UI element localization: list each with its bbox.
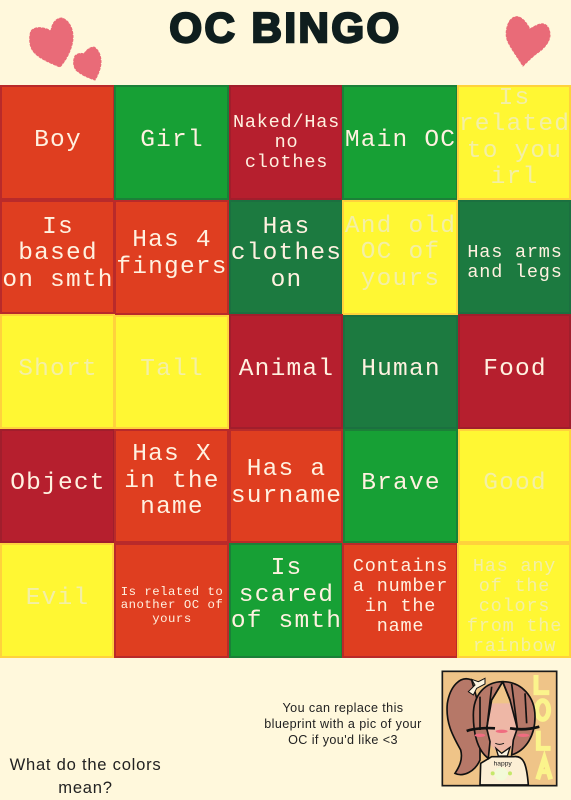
hair xyxy=(473,682,503,758)
bingo cell: Object: Object xyxy=(10,470,106,497)
bingo cell: Human xyxy=(343,315,458,429)
bingo cell: Human: Human xyxy=(361,356,441,383)
bingo cell: 4 fingers: Has 4 fingers xyxy=(116,227,228,280)
bow xyxy=(468,678,485,695)
ponytail xyxy=(447,679,480,775)
bingo cell: Tall: Tall xyxy=(140,356,204,383)
collar xyxy=(496,747,510,756)
bingo cell: old OC: And old OC of yours xyxy=(345,213,456,293)
bingo cell: Good: Good xyxy=(483,470,547,497)
eyes and blush xyxy=(467,727,539,731)
name letters xyxy=(536,675,551,779)
bingo cell: surname: Has a surname xyxy=(231,456,342,510)
bingo cell: old OC xyxy=(342,200,458,315)
bingo cell: Food xyxy=(458,314,571,429)
bingo cell: Boy xyxy=(0,85,115,200)
bingo cell: based on smth xyxy=(0,200,115,314)
bingo cell: Girl: Girl xyxy=(140,127,204,154)
icon: two pixel hearts xyxy=(29,18,102,81)
bingo cell: Brave: Brave xyxy=(361,470,441,497)
text: colors question: What do the colors xyxy=(10,755,161,774)
bingo cell: related to another OC xyxy=(114,543,229,658)
text: colors question: mean? xyxy=(58,778,113,797)
bingo cell: Girl xyxy=(114,85,229,200)
bingo cell: Food: Food xyxy=(483,356,547,383)
text: blueprint note xyxy=(264,701,422,747)
bingo cell: Naked: Naked/Has no clothes xyxy=(233,112,340,172)
bingo cell: Tall xyxy=(114,315,229,429)
bingo cell: Naked xyxy=(229,85,343,200)
text: blueprint note: blueprint with a pic of your xyxy=(264,717,422,731)
text: blueprint note: OC if you'd like <3 xyxy=(288,733,398,747)
bingo cell: Main OC: Main OC xyxy=(345,127,456,154)
bingo cell: related to another OC: Is related to another OC of yours xyxy=(121,585,223,626)
bingo cell: 4 fingers xyxy=(114,200,229,315)
bingo cell: Good xyxy=(458,429,571,543)
flower xyxy=(494,767,508,781)
bingo cell: X in name: Has X in the name xyxy=(124,441,220,521)
bingo cell: Short: Short xyxy=(18,356,98,383)
bingo cell: Boy: Boy xyxy=(34,127,82,154)
face xyxy=(485,703,522,752)
bingo cell: number in name xyxy=(342,543,458,658)
picture: OC portrait Lola xyxy=(442,670,558,786)
text: blueprint note: You can replace this xyxy=(283,701,403,715)
title: OC BINGO xyxy=(169,4,402,51)
bingo cell: based on smth: Is based on smth xyxy=(2,214,114,294)
bingo cell: Main OC xyxy=(342,85,458,200)
bingo cell: scared xyxy=(229,543,343,658)
bingo cell: surname xyxy=(229,429,343,543)
icon: pixel heart right xyxy=(506,16,550,67)
bingo cell: scared: Is scared of smth xyxy=(231,555,342,635)
bingo cell: Brave xyxy=(343,429,458,543)
bingo cell: Animal xyxy=(229,314,343,429)
body xyxy=(480,756,528,785)
bingo cell: Animal: Animal xyxy=(239,356,334,383)
bingo cell: Evil xyxy=(0,543,114,658)
bingo cell: related to you: Is related to you irl xyxy=(459,84,570,191)
bingo cell: arms and legs xyxy=(458,200,571,314)
bingo cell: arms and legs: Has arms and legs xyxy=(467,242,563,282)
bingo cell: number in name: Contains a number in the name xyxy=(353,556,448,636)
bingo cell: Object xyxy=(0,429,115,543)
bingo cell: X in name xyxy=(114,429,229,543)
bingo cell: Short xyxy=(0,314,115,429)
bingo cell: rainbow: Has any of the colors from the rainbow xyxy=(467,556,562,656)
bingo cell: has clothes on: Has clothes on xyxy=(231,214,342,294)
text: colors question xyxy=(10,755,161,797)
bingo cell: Evil: Evil xyxy=(26,585,89,612)
shirt text: happy xyxy=(494,760,512,767)
bingo cell: has clothes on xyxy=(229,200,343,314)
